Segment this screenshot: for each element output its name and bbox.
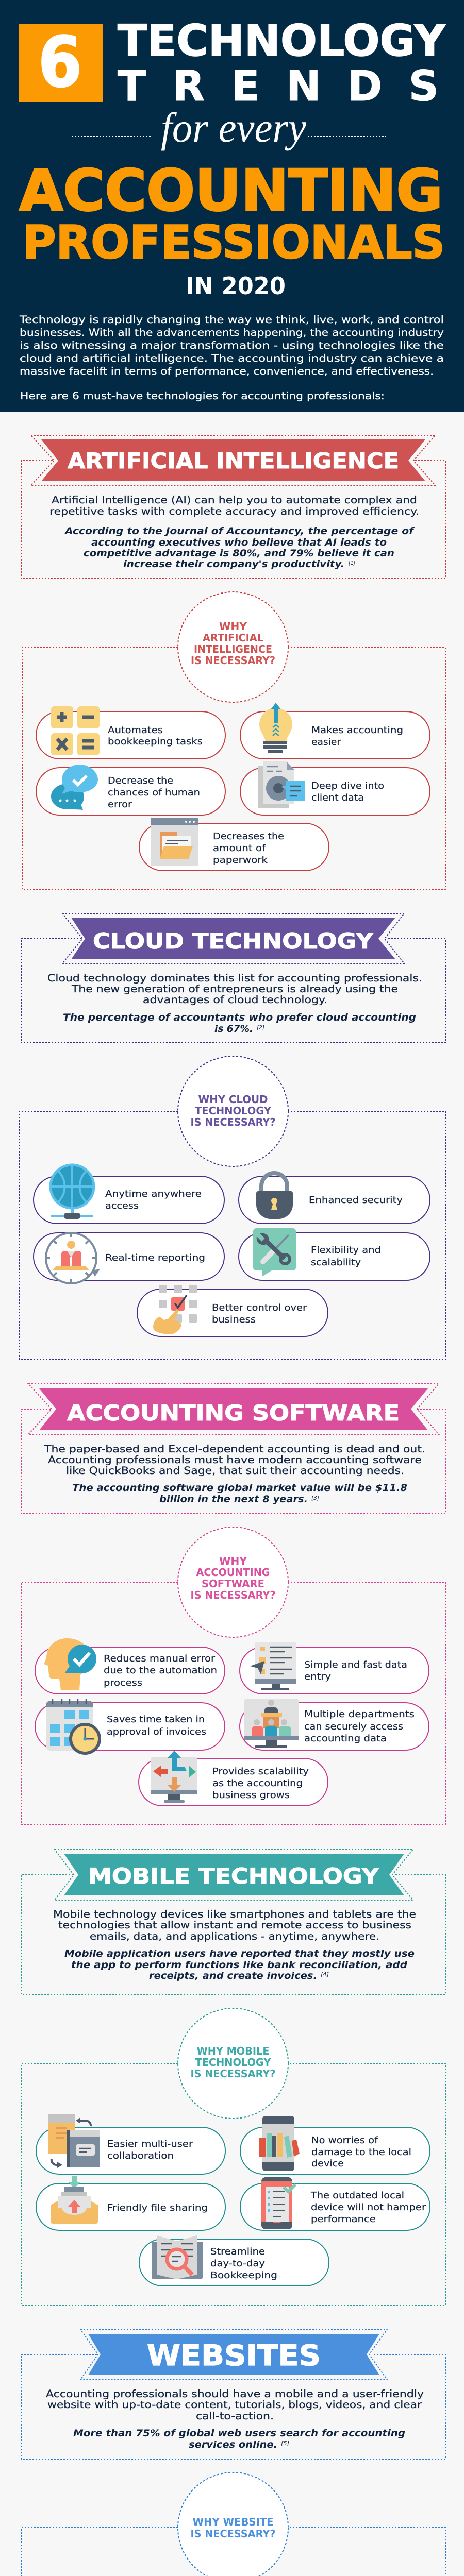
item: automates bookkeeping xyxy=(36,706,225,759)
intro text: is 67%. xyxy=(214,1023,253,1035)
item: deep dive into client data: client data xyxy=(311,792,364,803)
panel: why mobile is necessary xyxy=(22,2008,445,2306)
item: streamline bookkeeping: Bookkeeping xyxy=(210,2270,277,2281)
item: decrease human error: Decrease the xyxy=(108,775,173,786)
item: anytime anywhere access xyxy=(34,1165,224,1224)
icon: monitor with arrows xyxy=(151,1751,197,1803)
item: provides scalability: Provides scalability xyxy=(212,1766,309,1777)
circle heading: TECHNOLOGY xyxy=(195,1105,272,1117)
icon: document and disc xyxy=(258,761,305,808)
intro text xyxy=(49,494,419,570)
item: simple and fast data entry: entry xyxy=(304,1671,331,1682)
circle heading: TECHNOLOGY xyxy=(195,2056,272,2069)
item: multi-user collaboration xyxy=(36,2114,225,2174)
item: streamline bookkeeping: Streamline xyxy=(210,2246,265,2257)
section: cloud technology xyxy=(20,913,445,1360)
panel: why AI is necessary xyxy=(22,592,445,889)
intro text: [4] xyxy=(321,1971,329,1978)
intro text: the app to perform functions like bank reconciliation, add xyxy=(71,1959,407,1971)
circle heading: WHY WEBSITE xyxy=(193,2516,273,2528)
icon: padlock xyxy=(256,1173,293,1219)
icon: monitor list xyxy=(250,1642,296,1690)
intro text: [2] xyxy=(257,1024,264,1031)
item: saves time on invoices: Saves time taken in xyxy=(107,1714,205,1725)
circle heading xyxy=(178,2008,288,2119)
circle heading: IS NECESSARY? xyxy=(191,2067,275,2080)
item: automates bookkeeping: Automates xyxy=(108,725,163,736)
intro paragraph: Technology is rapidly changing the way we think, live, work, and control xyxy=(19,314,444,326)
panel: websites intro xyxy=(21,2329,445,2459)
ribbon heading: MOBILE TECHNOLOGY xyxy=(88,1863,379,1889)
intro text: billion in the next 8 years. xyxy=(159,1494,308,1505)
item: flexibility and scalability: Flexibility and xyxy=(311,1245,381,1256)
panel: mobile intro xyxy=(21,1850,445,1994)
circle heading: WHY CLOUD xyxy=(198,1093,268,1106)
item: no worries of damage: No worries of xyxy=(311,2135,378,2146)
circle heading: SOFTWARE xyxy=(202,1578,264,1590)
panel: AI intro xyxy=(21,435,445,579)
intro text: receipts, and create invoices. xyxy=(149,1970,317,1981)
intro paragraph xyxy=(19,314,444,402)
intro text xyxy=(46,2388,424,2450)
icon: folder window xyxy=(151,818,198,866)
section: artificial intelligence xyxy=(21,435,445,889)
intro text: The paper-based and Excel-dependent accounting is dead and out. xyxy=(44,1443,425,1455)
circle heading: ACCOUNTING xyxy=(196,1566,270,1579)
item: enhanced security: Enhanced security xyxy=(309,1195,403,1206)
item: multiple departments: accounting data xyxy=(304,1733,387,1744)
ribbon heading xyxy=(39,1388,428,1430)
item: no worries of damage xyxy=(240,2116,430,2174)
circle heading: IS NECESSARY? xyxy=(191,2528,275,2540)
item: outdated device no hamper: The outdated local xyxy=(310,2190,404,2201)
intro text: Accounting professionals must have modern accounting software xyxy=(48,1454,422,1466)
icon: open book with magnifier xyxy=(152,2235,203,2279)
intro text: technologies that allow instant and remote access to business xyxy=(58,1919,411,1931)
item: multiple departments: can securely access xyxy=(304,1721,403,1732)
item: multiple departments: Multiple departments xyxy=(304,1709,415,1720)
item: makes accounting easier: Makes accounting xyxy=(311,725,403,736)
item: reduces manual error xyxy=(35,1638,225,1694)
circle heading xyxy=(178,2472,288,2576)
circle heading: IS NECESSARY? xyxy=(191,1589,275,1601)
circle heading xyxy=(178,592,288,702)
item: saves time on invoices xyxy=(35,1699,225,1753)
icon: inbox tray xyxy=(51,2176,98,2224)
icon: calendar touch xyxy=(153,1285,197,1334)
intro text: The accounting software global market value will be $11.8 xyxy=(72,1482,407,1494)
item: provides scalability: as the accounting xyxy=(212,1778,303,1789)
intro paragraph: businesses. With all the advancements happening, the accounting industry xyxy=(20,327,444,338)
ribbon heading xyxy=(64,1854,404,1895)
header panel xyxy=(0,0,464,412)
script subtitle: for every: for every xyxy=(161,104,307,151)
title: in 2020: IN 2020 xyxy=(186,272,286,300)
circle heading: IS NECESSARY? xyxy=(191,1116,275,1128)
item: outdated device no hamper: device will not hamper xyxy=(311,2202,426,2213)
intro paragraph: massive facelift in terms of performance, convenience, and effectiveness. xyxy=(20,365,434,377)
item: automates bookkeeping: bookkeeping tasks xyxy=(108,736,203,747)
ribbon heading: ARTIFICIAL INTELLIGENCE xyxy=(68,448,399,473)
panel: software intro xyxy=(21,1384,445,1514)
item: friendly file sharing xyxy=(36,2176,225,2230)
intro text: like QuickBooks and Sage, that suit their accounting needs. xyxy=(66,1465,404,1477)
item: real-time reporting xyxy=(34,1233,224,1283)
title: accounting: ACCOUNTING xyxy=(19,158,443,224)
icon: clock with person xyxy=(46,1233,100,1283)
intro text: [1] xyxy=(349,560,355,566)
item: decreases paperwork: paperwork xyxy=(213,855,268,866)
intro text: Mobile technology devices like smartphones and tablets are the xyxy=(53,1908,416,1920)
number badge: 6: 6 xyxy=(38,22,82,103)
intro text: The new generation of entrepreneurs is already using the xyxy=(71,983,398,995)
item: outdated device no hamper xyxy=(240,2177,430,2230)
item: friendly file sharing: Friendly file sharing xyxy=(107,2202,208,2213)
item: anytime anywhere access: Anytime anywhere xyxy=(105,1189,202,1199)
intro text xyxy=(47,972,422,1035)
item: deep dive into client data xyxy=(240,761,430,815)
intro text: The percentage of accountants who prefer cloud accounting xyxy=(63,1012,416,1023)
intro text: competitive advantage is 80%, and 79% believe it can xyxy=(84,548,394,559)
intro text: call-to-action. xyxy=(196,2410,274,2422)
icon: calendar and clock xyxy=(46,1699,100,1753)
title: trends: TRENDS xyxy=(118,62,439,111)
item: streamline bookkeeping: day-to-day xyxy=(210,2258,265,2269)
circle heading xyxy=(178,1527,288,1637)
item: makes accounting easier xyxy=(240,703,430,759)
panel: why website is necessary xyxy=(22,2472,445,2576)
number badge: 6 xyxy=(19,22,103,103)
intro text: Cloud technology dominates this list for accounting professionals. xyxy=(47,972,422,984)
icon: calculator keys xyxy=(51,706,100,755)
intro text: More than 75% of global web users search for accounting xyxy=(73,2428,405,2439)
item: provides scalability xyxy=(139,1751,328,1806)
item: decreases paperwork: Decreases the xyxy=(213,831,284,842)
item: multi-user collaboration: Easier multi-user xyxy=(107,2139,193,2149)
icon: phone with books xyxy=(259,2116,300,2171)
item: multiple departments xyxy=(240,1699,429,1750)
ribbon heading: CLOUD TECHNOLOGY xyxy=(93,928,374,954)
item: real-time reporting: Real-time reporting xyxy=(105,1252,205,1263)
icon: light bulb xyxy=(259,703,292,753)
section: accounting software xyxy=(21,1384,445,1824)
item: better control over business: business xyxy=(212,1314,256,1325)
item: decreases paperwork xyxy=(139,818,329,871)
circle heading xyxy=(178,1056,288,1166)
item: reduces manual error: process xyxy=(104,1677,142,1688)
circle heading: WHY xyxy=(219,620,247,633)
item: reduces manual error: Reduces manual error xyxy=(104,1653,216,1664)
item: flexibility and scalability: scalability xyxy=(311,1257,361,1268)
panel: why software is necessary xyxy=(21,1527,445,1824)
item: better control over business xyxy=(137,1285,328,1336)
ribbon heading: ACCOUNTING SOFTWARE xyxy=(67,1400,400,1426)
ribbon heading: WEBSITES xyxy=(147,2339,321,2372)
intro text: Mobile application users have reported that they mostly use xyxy=(64,1948,415,1959)
item: makes accounting easier: easier xyxy=(311,737,341,748)
intro text xyxy=(53,1908,416,1981)
circle heading: WHY xyxy=(219,1555,247,1567)
icon: red phone xyxy=(261,2177,295,2229)
item: no worries of damage: damage to the local xyxy=(311,2147,411,2158)
item: decrease human error: chances of human xyxy=(108,787,200,798)
icon: chat bubbles xyxy=(51,765,98,810)
intro paragraph: is also witnessing a major transformation - using technologies like the xyxy=(20,340,444,351)
intro text xyxy=(44,1443,425,1505)
circle heading: WHY MOBILE xyxy=(197,2045,269,2057)
item: decrease human error: error xyxy=(108,799,132,810)
ribbon heading xyxy=(88,2334,379,2375)
circle heading: ARTIFICIAL xyxy=(203,632,263,644)
item: simple and fast data entry: Simple and fast data xyxy=(304,1659,407,1670)
intro text: website with up-to-date content, tutorials, blogs, videos, and clear xyxy=(47,2399,422,2411)
intro text: Artificial Intelligence (AI) can help you to automate complex and xyxy=(52,494,417,506)
intro text: According to the Journal of Accountancy, the percentage of xyxy=(64,526,415,537)
section: mobile technology xyxy=(21,1850,445,2306)
circle heading: IS NECESSARY? xyxy=(191,654,275,667)
intro text: advantages of cloud technology. xyxy=(143,994,327,1006)
intro paragraph: Here are 6 must-have technologies for accounting professionals: xyxy=(20,390,385,402)
ribbon heading xyxy=(41,439,425,481)
icon: tools xyxy=(253,1228,296,1277)
item: reduces manual error: due to the automation xyxy=(104,1665,217,1676)
item: decreases paperwork: amount of xyxy=(213,843,266,854)
item: deep dive into client data: Deep dive into xyxy=(311,781,384,791)
item: simple and fast data entry xyxy=(240,1642,429,1694)
item: outdated device no hamper: performance xyxy=(311,2214,376,2225)
section: websites xyxy=(21,2329,445,2576)
item: streamline bookkeeping xyxy=(139,2235,329,2286)
intro text: [3] xyxy=(311,1495,319,1501)
icon: globe xyxy=(51,1165,94,1219)
panel: why cloud is necessary xyxy=(20,1056,445,1360)
panel: cloud intro xyxy=(21,913,445,1043)
intro text: [5] xyxy=(281,2440,289,2447)
ribbon heading xyxy=(71,918,395,959)
item: provides scalability: business grows xyxy=(212,1790,290,1801)
icon: head with check xyxy=(44,1638,96,1690)
title: technology: TECHNOLOGY xyxy=(118,15,446,66)
intro text: services online. xyxy=(189,2439,277,2450)
item: decrease human error xyxy=(36,765,225,815)
item: flexibility and scalability xyxy=(239,1228,430,1280)
intro text: accounting executives who believe that AI leads to xyxy=(91,537,387,548)
title: professionals: PROFESSIONALS xyxy=(23,216,445,269)
item: multi-user collaboration: collaboration xyxy=(107,2150,174,2161)
icon: monitor with people xyxy=(244,1699,299,1748)
circle heading: INTELLIGENCE xyxy=(194,643,272,655)
item: better control over business: Better control over xyxy=(212,1302,307,1313)
item: no worries of damage: device xyxy=(311,2158,344,2169)
intro paragraph: cloud and artificial intelligence. The accounting industry can achieve a xyxy=(20,352,444,364)
item: enhanced security xyxy=(239,1173,430,1224)
intro text: increase their company's productivity. xyxy=(123,558,344,570)
icon: books xyxy=(48,2114,100,2168)
item: anytime anywhere access: access xyxy=(105,1200,139,1211)
intro text: Accounting professionals should have a mobile and a user-friendly xyxy=(46,2388,424,2400)
intro text: emails, data, and applications - anytime, anywhere. xyxy=(90,1930,379,1942)
intro text: repetitive tasks with complete accuracy and improved efficiency. xyxy=(49,505,419,517)
item: saves time on invoices: approval of invoices xyxy=(107,1726,206,1737)
